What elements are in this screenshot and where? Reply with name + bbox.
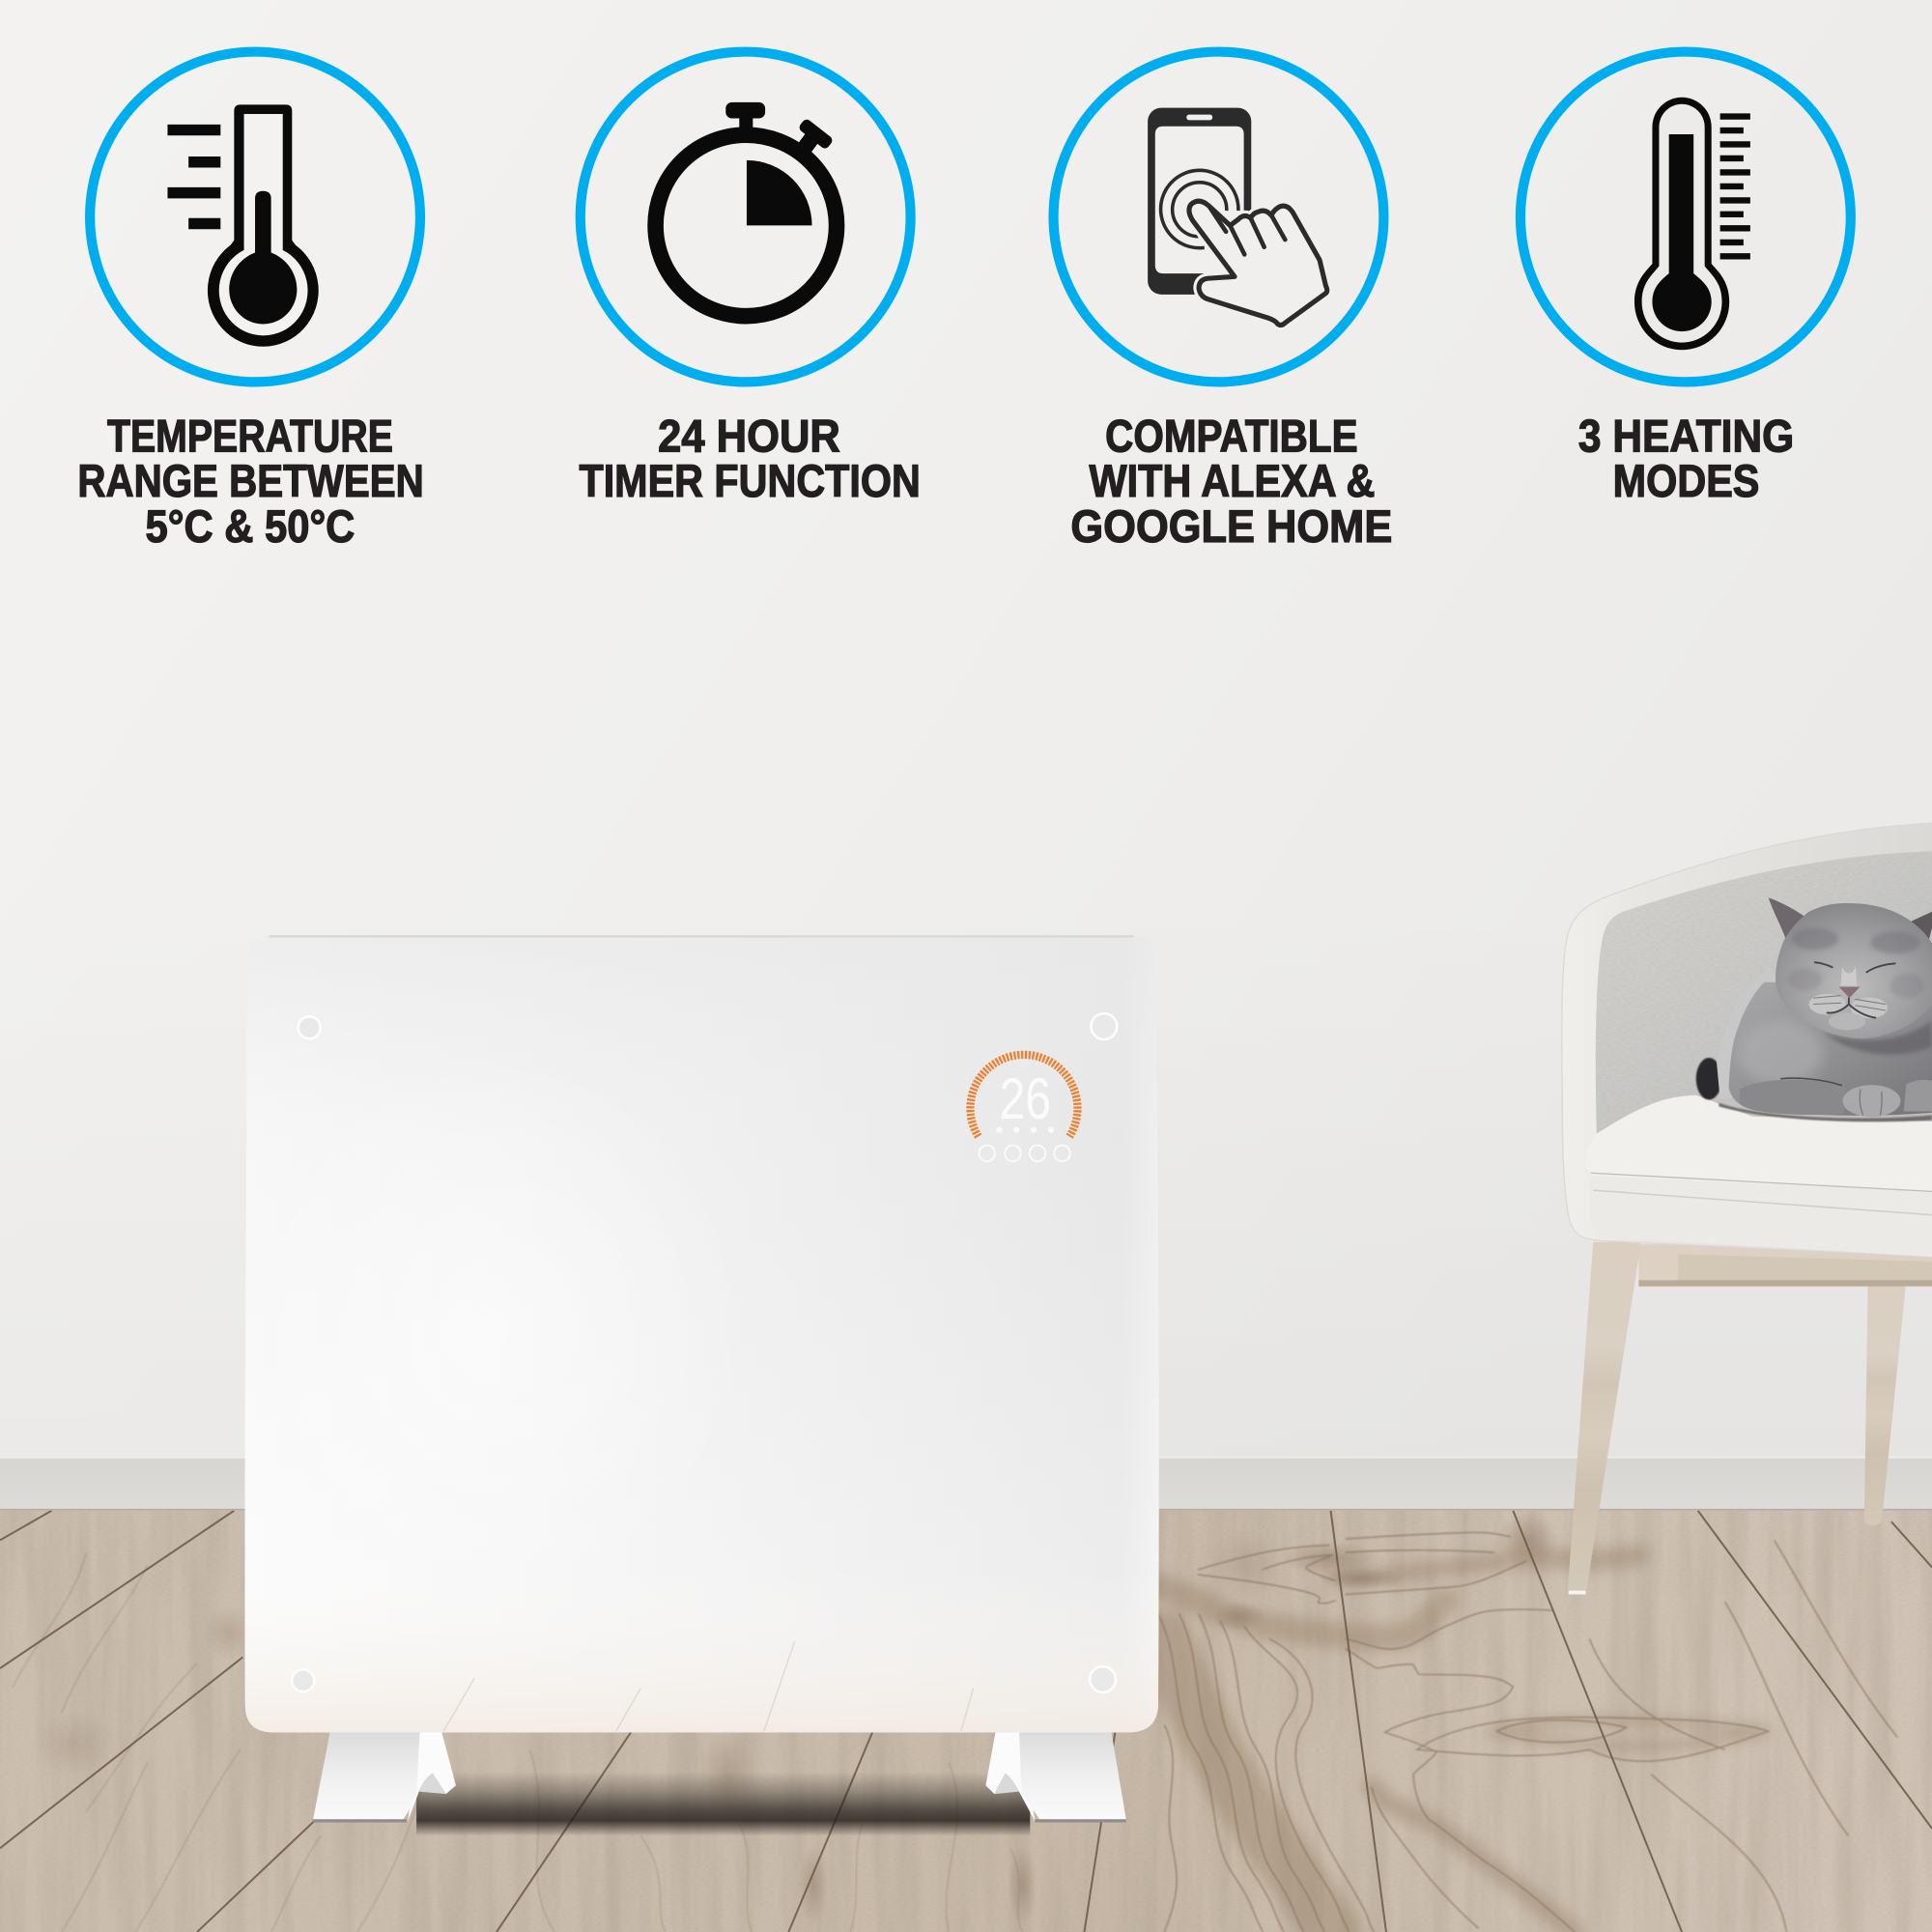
cat nose	[1839, 987, 1860, 998]
icon circle: heating modes	[1520, 52, 1851, 382]
icon circle: temperature range	[90, 52, 420, 382]
cat chest shadow	[1824, 1020, 1932, 1055]
cat body	[1729, 982, 1932, 1116]
skirting board	[0, 1457, 1932, 1511]
chair wooden rail	[1638, 1244, 1932, 1287]
orange arc gauge	[970, 1055, 1077, 1137]
cat shadow on cushion	[1719, 1103, 1932, 1122]
wall background	[0, 0, 1932, 1466]
chair inner back	[1589, 844, 1932, 1146]
label: timer: 24 HOUR	[658, 411, 840, 462]
cat forehead shading	[1788, 927, 1924, 998]
heater right foot	[985, 1725, 1126, 1822]
label: smart home: COMPATIBLE	[1105, 411, 1358, 462]
heater left foot	[313, 1725, 456, 1822]
floor stains and knots	[31, 1513, 1559, 1927]
label: timer: TIMER FUNCTION	[579, 456, 921, 507]
touch buttons	[979, 1146, 1070, 1161]
label: temperature range: 5°C & 50°C	[146, 501, 355, 553]
temperature digits: 26	[999, 1066, 1051, 1131]
wooden floor	[0, 1511, 1932, 1932]
plank joints	[0, 1511, 1932, 1932]
chair shell	[1562, 823, 1932, 1257]
cat face lines	[1814, 962, 1895, 1018]
cat paws	[1740, 1078, 1932, 1117]
dark grain bands	[1159, 1555, 1768, 1932]
mode dots	[996, 1126, 1054, 1133]
heater glass panel	[244, 936, 1159, 1732]
label: smart home: GOOGLE HOME	[1070, 501, 1392, 553]
panel mounting caps	[292, 1013, 1117, 1692]
label: heating modes: MODES	[1613, 456, 1759, 507]
icon: thermometer with ticks	[167, 104, 319, 347]
icon: stopwatch	[656, 102, 837, 316]
cat ears	[1768, 897, 1932, 939]
label: smart home: WITH ALEXA &	[1090, 456, 1375, 507]
chair back leg	[1864, 1282, 1906, 1525]
cat	[1696, 897, 1932, 1122]
icon circle: smart home	[1054, 52, 1383, 382]
label: temperature range: RANGE BETWEEN	[77, 456, 424, 507]
wood grain lines	[1158, 1532, 1897, 1932]
panel highlight	[234, 1047, 752, 1614]
chair lower cushion	[1589, 1176, 1932, 1257]
cat pale back	[1716, 970, 1773, 1099]
label: temperature range: TEMPERATURE	[107, 411, 393, 462]
cat tail	[1696, 1058, 1722, 1099]
cat muzzle	[1808, 966, 1888, 1030]
panel shading	[244, 936, 1159, 1732]
faint grain on left planks	[13, 1552, 1023, 1932]
icon circle: timer	[581, 52, 911, 382]
icon: thermometer	[1634, 98, 1750, 350]
fine floor texture	[0, 1511, 1932, 1932]
chair front leg	[1568, 1242, 1641, 1595]
temperature display	[970, 1055, 1077, 1161]
heater shadow on floor	[416, 1772, 1030, 1836]
cat head	[1776, 903, 1932, 1038]
heater	[234, 936, 1159, 1822]
floor reflection in the glass	[443, 1641, 974, 1731]
chair seat cushion	[1585, 1095, 1932, 1191]
chair	[1562, 823, 1932, 1595]
label: heating modes: 3 HEATING	[1578, 411, 1794, 462]
icon: phone and hand	[1148, 108, 1327, 325]
cat body light patch	[1739, 1021, 1822, 1086]
